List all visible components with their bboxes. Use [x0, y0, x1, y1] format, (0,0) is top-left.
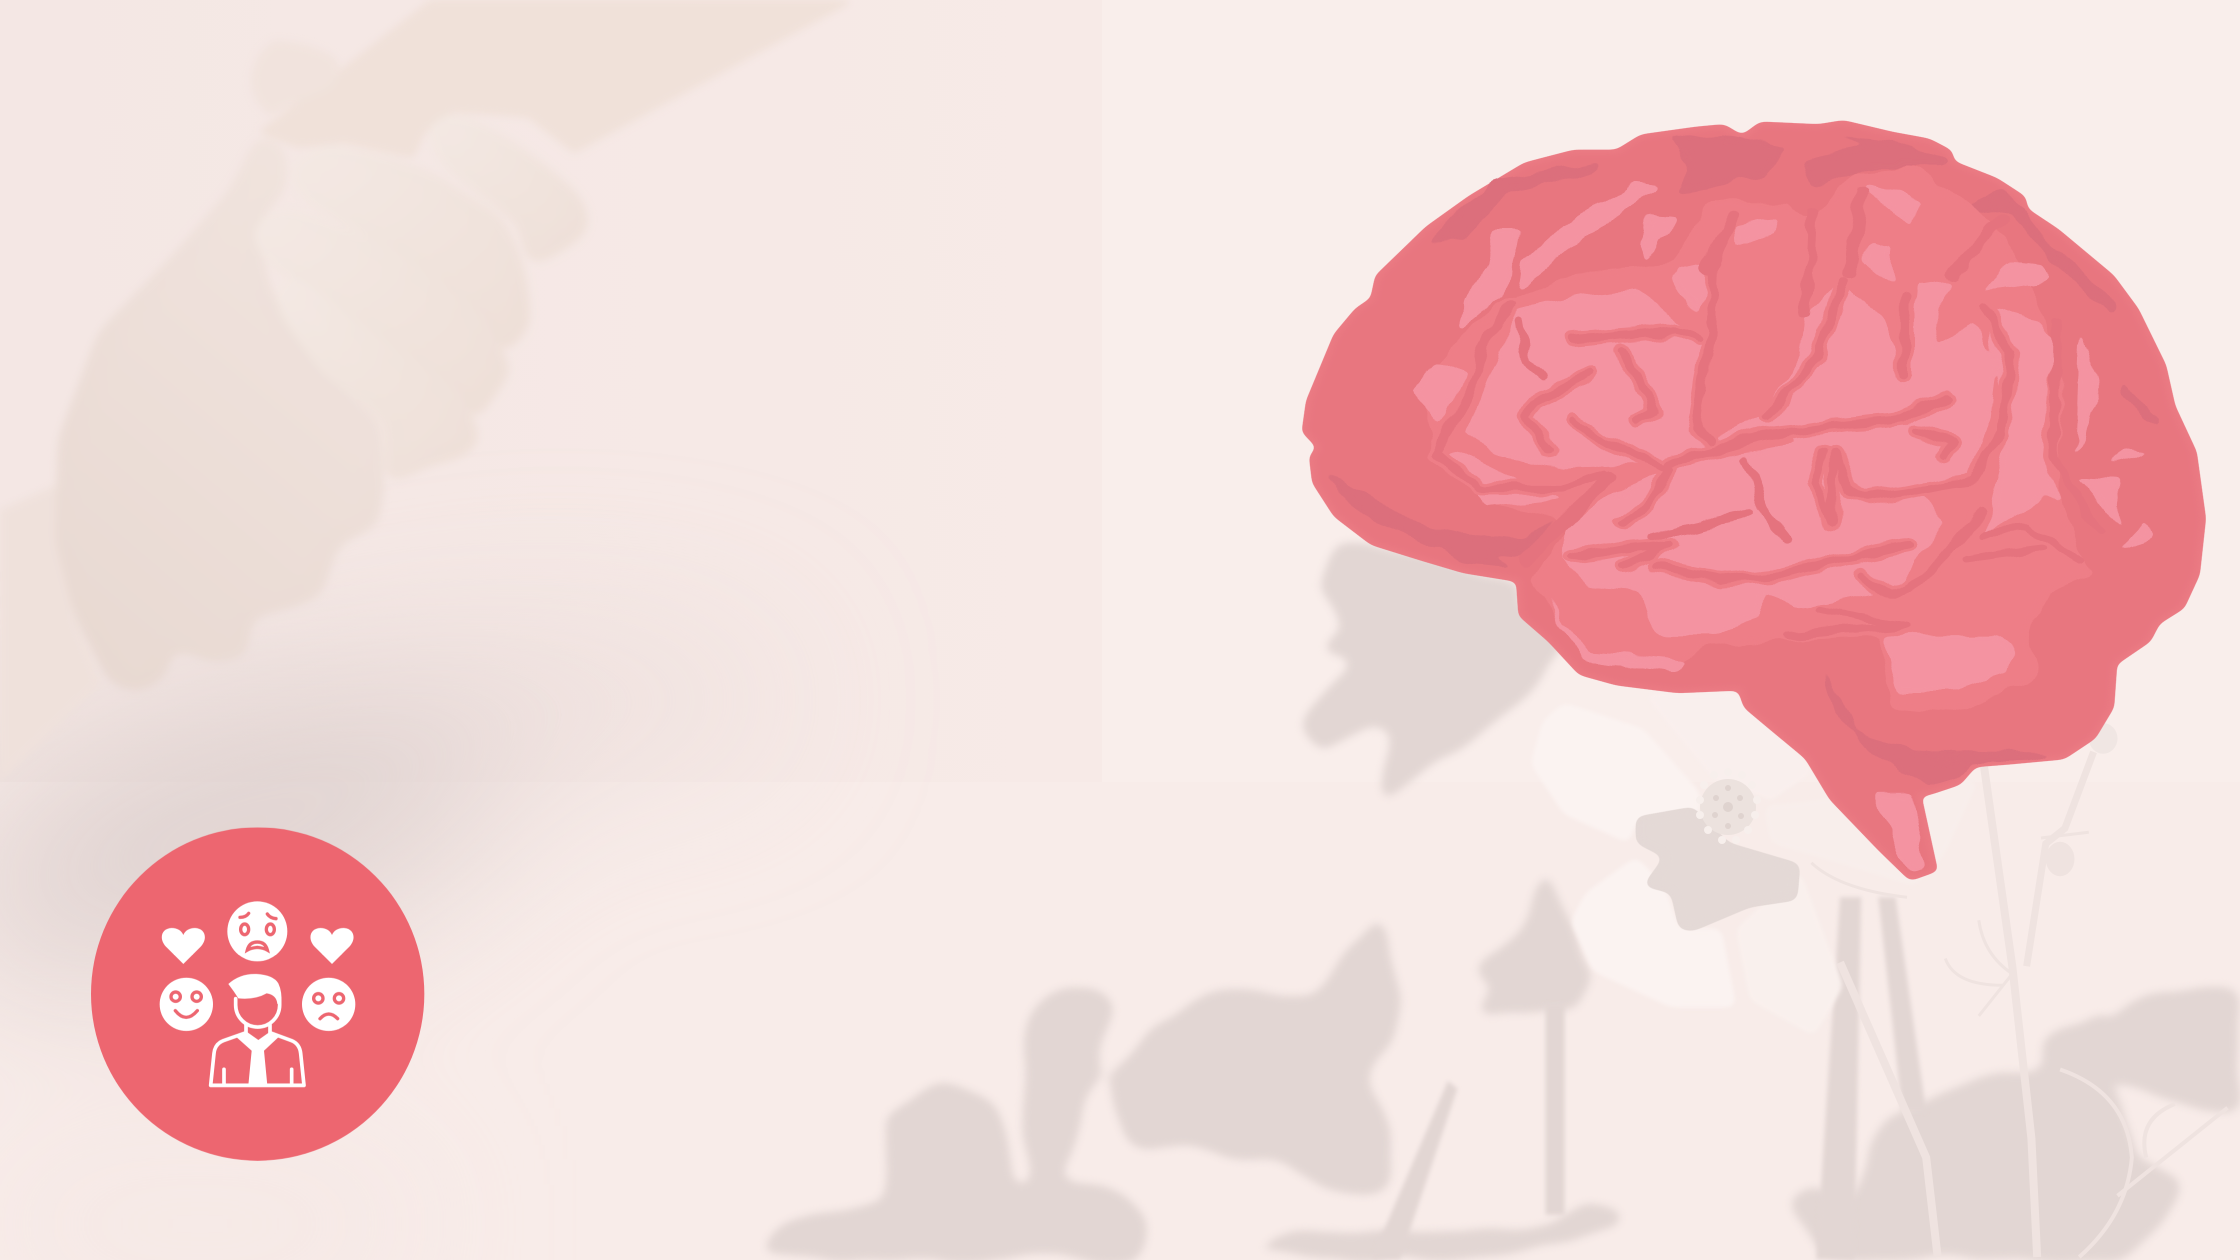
brain outline	[1303, 121, 2204, 880]
icon: happy face	[160, 978, 213, 1031]
icon: left heart	[162, 928, 205, 964]
brain sulci	[1436, 192, 2100, 636]
flower centre stamens	[1696, 768, 1761, 844]
photo: clasped hands	[0, 0, 855, 781]
icon: sad face	[302, 978, 355, 1031]
brain light lobes	[1412, 183, 2153, 870]
photo: flower stems	[1811, 723, 2228, 1257]
flower petal shadow	[1636, 807, 1800, 931]
icon: worried face	[227, 901, 287, 961]
icon disc	[91, 827, 424, 1161]
brain mid tone	[1421, 166, 2094, 712]
photo: shadow stems	[1371, 897, 1926, 1259]
icon: person with emotions in red circle	[91, 827, 424, 1161]
brain illustration	[1303, 121, 2204, 880]
brain shaded rim	[1323, 133, 2155, 786]
photo: white flower	[1531, 693, 1979, 1036]
icon: person	[211, 974, 304, 1085]
brain interior detail	[1323, 133, 2155, 870]
photo: flower shadows	[759, 539, 2238, 1259]
icon: right heart	[310, 928, 354, 964]
